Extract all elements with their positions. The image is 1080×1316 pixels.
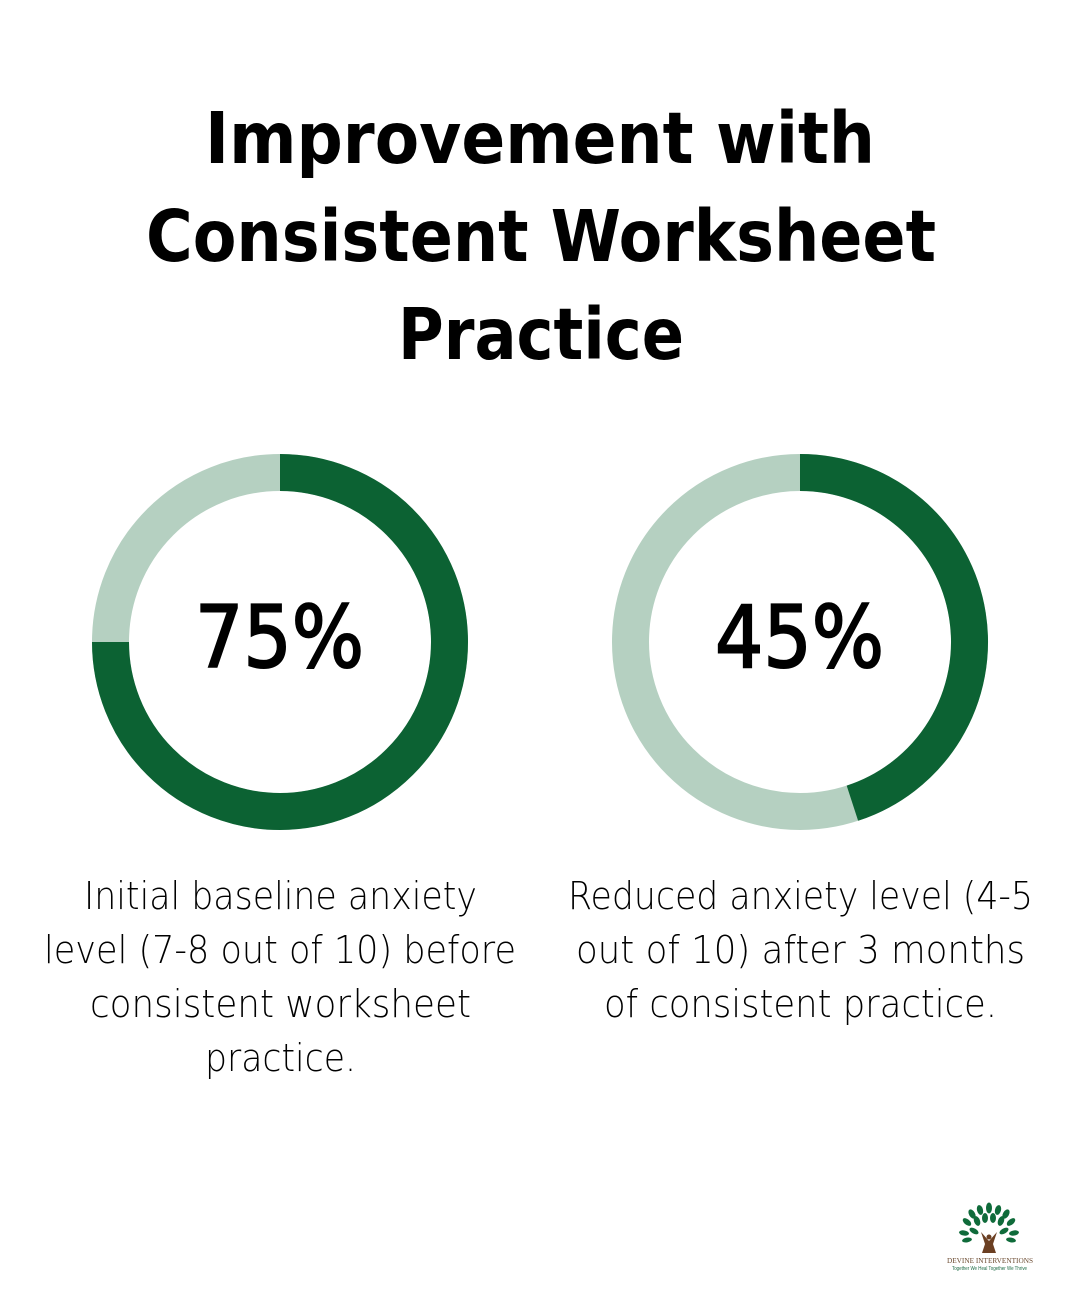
title bbox=[146, 97, 936, 376]
donut chart: 45%: 45% bbox=[715, 588, 884, 688]
description: 45%: out of 10) after 3 months bbox=[576, 928, 1025, 972]
description: 45%: of consistent practice. bbox=[604, 982, 997, 1026]
description: 75%: consistent worksheet bbox=[90, 982, 471, 1026]
donut chart: 75%: 75% bbox=[195, 588, 364, 688]
description: 75%: Initial baseline anxiety bbox=[84, 874, 477, 918]
logo tagline: Together We Heal Together We Thrive bbox=[952, 1266, 1027, 1272]
title: Consistent Worksheet bbox=[146, 195, 936, 278]
description: 45% bbox=[568, 874, 1033, 1026]
title: Practice bbox=[398, 293, 684, 376]
donut chart: 45% bbox=[630, 472, 970, 812]
logo name: DEVINE INTERVENTIONS bbox=[947, 1257, 1033, 1265]
description: 75% bbox=[44, 874, 516, 1080]
logo: Devine Interventions bbox=[947, 1202, 1033, 1272]
icon: tree bbox=[959, 1202, 1019, 1243]
title: Improvement with bbox=[205, 97, 875, 180]
donut chart: 75% bbox=[110, 472, 450, 812]
icon: person trunk bbox=[981, 1232, 997, 1253]
description: 45%: Reduced anxiety level (4-5 bbox=[568, 874, 1033, 918]
description: 75%: level (7-8 out of 10) before bbox=[44, 928, 516, 972]
description: 75%: practice. bbox=[205, 1036, 356, 1080]
